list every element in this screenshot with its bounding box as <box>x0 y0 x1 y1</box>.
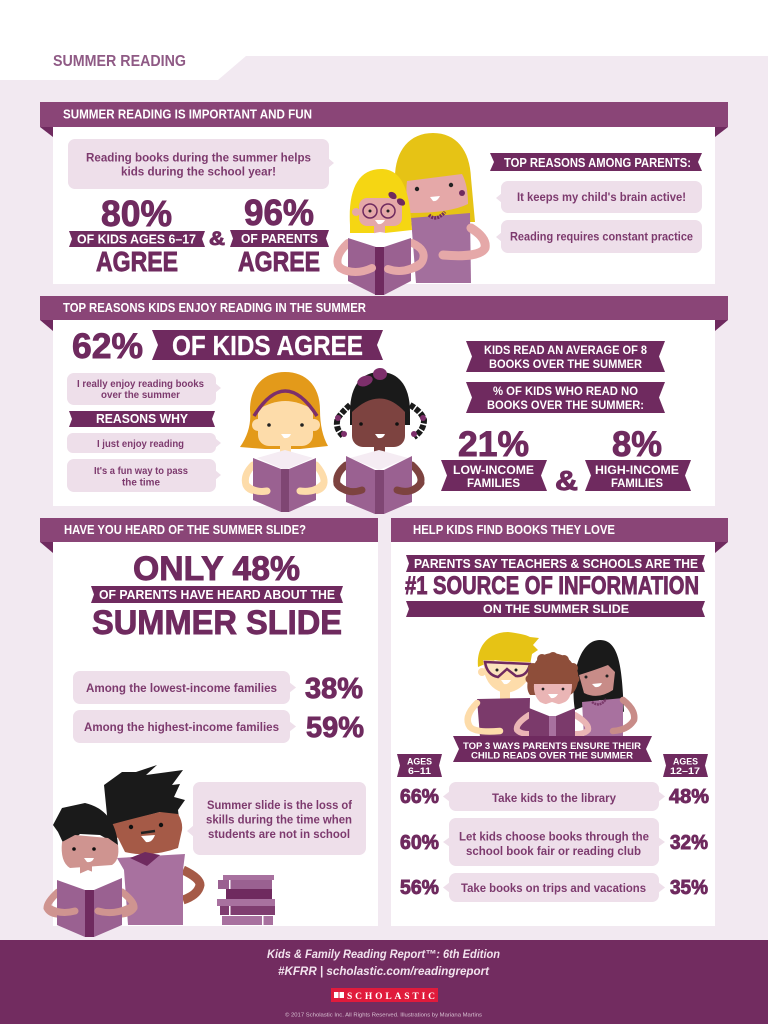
ribbon: ages 6-11: 6–11 <box>408 766 432 777</box>
stat: 62%: 62% <box>72 327 143 366</box>
stat: 8% high-income: HIGH-INCOME <box>595 463 679 477</box>
callout: constant practice: Reading requires constant practice <box>510 232 693 244</box>
row: school book fair: school book fair or reading club <box>466 846 641 858</box>
ribbon: top reasons among parents: TOP REASONS AMONG PARENTS: <box>504 155 691 170</box>
row: trips and vacations: 56% <box>400 877 439 899</box>
callout: fun way to pass the time <box>67 459 221 492</box>
row: school book fair <box>400 818 708 866</box>
callout: enjoy reading books: I really enjoy reading books <box>77 378 204 390</box>
row: lowest-income families <box>73 671 363 705</box>
ribbon: of kids agree: OF KIDS AGREE <box>172 330 363 361</box>
callout: summer slide definition: Summer slide is the loss of <box>207 800 352 812</box>
row: trips and vacations <box>400 873 708 902</box>
row: highest-income families <box>73 710 364 744</box>
ribbon: average of 8 books: BOOKS OVER THE SUMMER <box>489 357 642 371</box>
logo: scholastic: SCHOLASTIC <box>347 992 435 1002</box>
row: take kids to the library: 66% <box>400 786 439 808</box>
stat: 96% of parents: 96% <box>244 192 314 233</box>
ribbon: ages 6-11: AGES <box>407 756 432 768</box>
ampersand: & <box>555 465 578 496</box>
stat: only 48%: ONLY 48% <box>133 550 300 588</box>
callout: summer slide definition <box>187 782 366 855</box>
heading banner <box>40 518 378 553</box>
row: highest-income families: 59% <box>306 712 364 744</box>
row: trips and vacations: Take books on trips and vacations <box>461 883 646 895</box>
row: lowest-income families: Among the lowest-income families <box>86 683 277 695</box>
callout: summer slide definition: students are not in school <box>208 829 350 841</box>
row: take kids to the library: Take kids to the library <box>492 793 617 805</box>
panel: help kids find books they love <box>391 518 728 926</box>
heading banner: HAVE YOU HEARD OF THE SUMMER SLIDE? <box>64 523 306 537</box>
stat: 96% of parents: OF PARENTS <box>241 232 318 246</box>
stat: 8% high-income <box>585 425 691 491</box>
row: take kids to the library <box>400 782 709 811</box>
stat: 21% low-income <box>441 425 547 491</box>
panel: summer reading is important and fun <box>40 102 728 295</box>
ribbon: top 3 ways: CHILD READS OVER THE SUMMER <box>471 750 633 762</box>
heading banner: TOP REASONS KIDS ENJOY READING IN THE SUMMER <box>63 301 366 315</box>
ribbon: kids who read no books: % OF KIDS WHO READ NO <box>493 384 638 398</box>
ribbon: average of 8 books: KIDS READ AN AVERAGE OF 8 <box>484 343 647 357</box>
ribbon: of parents have heard: OF PARENTS HAVE HEARD ABOUT THE <box>99 588 335 602</box>
callout: fun way to pass the time: the time <box>122 476 160 488</box>
stat: 21% low-income: FAMILIES <box>467 476 520 490</box>
callout: brain active: It keeps my child's brain active! <box>517 192 686 204</box>
ribbon: kids who read no books <box>466 382 665 413</box>
ribbon: kids who read no books: BOOKS OVER THE SUMMER: <box>487 398 644 412</box>
callout: reading helps: Reading books during the summer helps <box>86 152 311 164</box>
heading banner <box>391 518 728 553</box>
stat: 21% low-income: 21% <box>458 425 529 464</box>
row: highest-income families: Among the highest-income families <box>84 722 279 734</box>
logo: scholastic <box>331 988 438 1002</box>
stat: 80% of kids <box>69 193 205 277</box>
stat: 80% of kids: 80% <box>101 193 172 234</box>
panel: top reasons kids enjoy reading <box>40 296 728 514</box>
ribbon: reasons why <box>69 411 215 427</box>
stat: 80% of kids: AGREE <box>96 246 178 277</box>
row: trips and vacations: 35% <box>670 877 708 899</box>
ribbon: on the summer slide: ON THE SUMMER SLIDE <box>483 602 629 616</box>
ribbon: parents say teachers: PARENTS SAY TEACHERS & SCHOOLS ARE THE <box>414 557 698 571</box>
ribbon: ages 12-17: 12–17 <box>670 766 700 777</box>
panel: have you heard of the summer slide <box>40 518 378 937</box>
report link: #KFRR | scholastic.com/readingreport <box>278 966 490 978</box>
stat: 96% of parents: AGREE <box>238 246 320 277</box>
stat: 96% of parents <box>230 192 329 277</box>
row: school book fair: 60% <box>400 832 439 854</box>
callout: fun way to pass the time: It's a fun way to pass <box>94 465 188 477</box>
ribbon: ages 12-17: AGES <box>673 756 698 768</box>
ribbon: top 3 ways: TOP 3 WAYS PARENTS ENSURE THEIR <box>463 741 641 752</box>
title: SUMMER READING <box>53 53 186 70</box>
icon: stack of books <box>217 875 275 925</box>
heading banner: HELP KIDS FIND BOOKS THEY LOVE <box>413 523 615 537</box>
callout: just enjoy reading: I just enjoy reading <box>97 438 184 450</box>
ribbon: on the summer slide <box>406 601 705 617</box>
stat: 80% of kids: OF KIDS AGES 6–17 <box>77 232 196 246</box>
ribbon: ages 12-17 <box>663 754 708 777</box>
ribbon: average of 8 books <box>466 341 665 372</box>
heading banner: SUMMER READING IS IMPORTANT AND FUN <box>63 108 312 122</box>
ribbon: ages 6-11 <box>397 754 442 777</box>
illustration: family reading <box>468 632 634 737</box>
row: school book fair: Let kids choose books through the <box>459 832 649 844</box>
callout: enjoy reading books <box>67 373 221 405</box>
illustration: mother and daughter reading <box>337 133 485 295</box>
report title: Kids & Family Reading Report™: 6th Edition <box>267 949 500 961</box>
ribbon: reasons why: REASONS WHY <box>96 412 189 426</box>
stat: 8% high-income: 8% <box>612 425 662 464</box>
callout: reading helps: kids during the school year! <box>121 166 276 178</box>
ampersand: & <box>209 229 225 250</box>
callout: summer slide definition: skills during the time when <box>206 814 352 826</box>
callout: reading helps <box>68 139 334 189</box>
footer <box>0 940 768 1024</box>
heading: summer slide: SUMMER SLIDE <box>92 604 342 642</box>
row: school book fair: 32% <box>670 832 708 854</box>
callout: constant practice <box>496 220 702 253</box>
illustration: father and son reading <box>47 765 200 937</box>
heading: source of information: #1 SOURCE OF INFORMATION <box>405 572 699 600</box>
row: lowest-income families: 38% <box>305 673 363 705</box>
ribbon: top 3 ways <box>453 736 652 762</box>
callout: enjoy reading books: over the summer <box>101 389 180 401</box>
stat: 21% low-income: LOW-INCOME <box>453 463 534 477</box>
callout: brain active <box>496 181 702 213</box>
callout: just enjoy reading <box>67 433 221 453</box>
illustration: two girls reading <box>240 368 426 514</box>
copyright: © 2017 Scholastic Inc. All Rights Reserved. Illustrations by Mariana Martins <box>285 1012 482 1018</box>
heading banner <box>40 296 728 331</box>
heading banner <box>40 102 728 137</box>
row: take kids to the library: 48% <box>669 786 709 808</box>
stat: 8% high-income: FAMILIES <box>611 476 663 490</box>
